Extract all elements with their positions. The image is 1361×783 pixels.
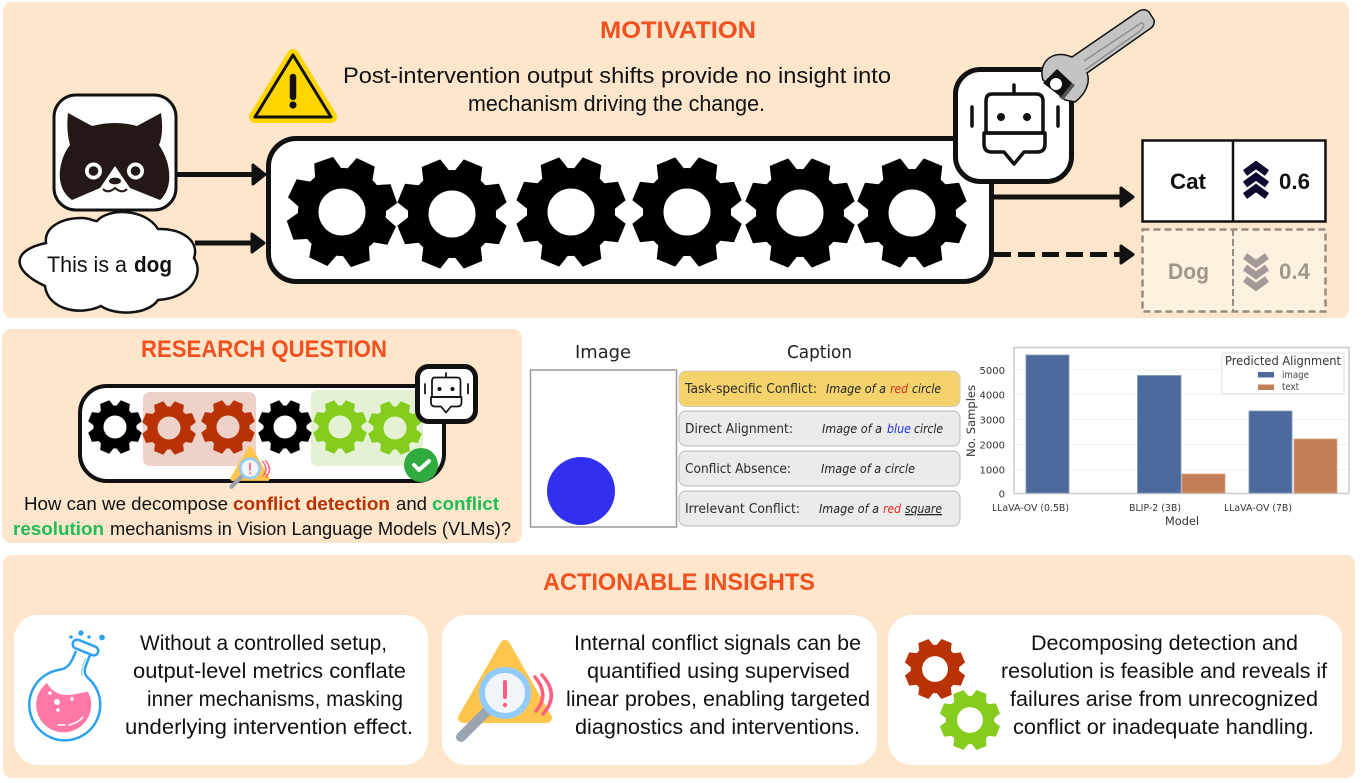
- text: linear probes insight: diagnostics and interventions.: [575, 716, 860, 739]
- legend: [1222, 353, 1344, 394]
- text: research question: [13, 493, 511, 539]
- heading: image: Image: [575, 343, 631, 363]
- icon: small conflict detection: [232, 448, 269, 487]
- text: decomposition insight: [1001, 632, 1327, 739]
- output: dog score: 0.4: [1279, 259, 1311, 284]
- row: direct alignment: [679, 411, 960, 446]
- icon: flask: [29, 630, 105, 740]
- bars: text: [1182, 439, 1337, 493]
- text: research question: and: [396, 493, 427, 514]
- figure: image and caption conditions: [530, 343, 960, 527]
- row: direct alignment: Direct Alignment:: [685, 422, 793, 437]
- text: research question: conflict detection: [233, 493, 390, 514]
- row: conflict absence: Image of a circle: [821, 461, 915, 476]
- text: decomposition insight: resolution is feasible and reveals if: [1001, 660, 1327, 683]
- row: irrelevant conflict: [679, 491, 960, 526]
- card: linear probes: [442, 615, 877, 765]
- row: task-specific conflict: [679, 371, 960, 406]
- text: controlled setup insight: Without a controlled setup,: [140, 632, 387, 655]
- axis labels: No. Samples: [964, 385, 978, 457]
- text: linear probes insight: quantified using supervised: [587, 660, 850, 683]
- axis labels: BLIP-2 (3B): [1129, 503, 1181, 514]
- icon: robot badge: [956, 70, 1072, 182]
- icon: check badge: [404, 448, 438, 482]
- axis labels: 1000: [980, 466, 1005, 476]
- row: direct alignment: Image of a: [822, 421, 882, 436]
- axis labels: 4000: [980, 390, 1005, 402]
- icon: conflict detection: [461, 645, 551, 737]
- heading: motivation: MOTIVATION: [600, 17, 756, 44]
- callout: caption cloud: [20, 212, 198, 313]
- text: controlled setup insight: [125, 632, 413, 739]
- arrow: image to model: [177, 165, 265, 184]
- callout: caption cloud: dog: [134, 252, 172, 277]
- icon: small robot badge: [418, 366, 476, 422]
- bar chart: predicted alignment: [964, 348, 1349, 528]
- text: motivation statement: Post-intervention output shifts provide no insight into: [343, 63, 891, 88]
- text: research question: mechanisms in Vision Language Models (VLMs)?: [110, 518, 511, 539]
- row: direct alignment: blue: [887, 421, 911, 436]
- axis labels: [964, 366, 1292, 528]
- axis labels: 0: [999, 490, 1005, 500]
- output: cat score: [1142, 140, 1326, 222]
- axis labels: 2000: [980, 440, 1005, 452]
- text: controlled setup insight: output-level metrics conflate: [133, 660, 406, 683]
- row: irrelevant conflict: Image of a: [819, 501, 879, 516]
- text: research question: conflict: [432, 493, 499, 514]
- icon: warning triangle: [255, 55, 331, 117]
- row: irrelevant conflict: red: [883, 501, 901, 516]
- row: task-specific conflict: red: [890, 381, 908, 396]
- legend: text: [1282, 382, 1299, 393]
- row: conflict absence: [679, 451, 960, 486]
- row: direct alignment: circle: [914, 421, 943, 436]
- heading: research question: RESEARCH QUESTION: [141, 336, 387, 363]
- panel: actionable insights: [3, 555, 1355, 778]
- text: research question: How can we decompose: [24, 493, 228, 514]
- heading: actionable insights: ACTIONABLE INSIGHTS: [543, 569, 815, 596]
- axis labels: LLaVA-OV (0.5B): [992, 503, 1069, 514]
- icon: wrench: [1042, 10, 1154, 102]
- diagram: model with highlighted gears: [80, 386, 444, 481]
- panel: motivation: [3, 2, 1349, 318]
- row: irrelevant conflict: Irrelevant Conflict:: [685, 502, 800, 517]
- legend: Predicted Alignment: [1225, 354, 1341, 368]
- image: blue circle: [530, 370, 676, 527]
- legend: image: [1282, 370, 1309, 381]
- panel: research question: [2, 329, 522, 543]
- text: decomposition insight: conflict or inadequate handling.: [1013, 716, 1314, 739]
- row: task-specific conflict: Task-specific Conflict:: [684, 382, 817, 397]
- output: cat score: Cat: [1170, 169, 1207, 194]
- text: motivation statement: [343, 63, 891, 116]
- text: motivation statement: mechanism driving the change.: [468, 91, 765, 116]
- arrow: caption to model: [195, 234, 264, 252]
- icon: cat image: [54, 95, 176, 210]
- text: linear probes insight: Internal conflict signals can be: [574, 632, 861, 655]
- card: decomposition: [888, 615, 1342, 765]
- output: cat score: 0.6: [1279, 169, 1310, 194]
- arrow: output cat: [994, 188, 1133, 206]
- output: dog score: Dog: [1168, 259, 1209, 284]
- panel: model with gears: [268, 138, 992, 282]
- row: conflict absence: Conflict Absence:: [685, 462, 791, 477]
- icon: red and green gears: [904, 638, 1001, 751]
- row: task-specific conflict: Image of a: [826, 381, 886, 396]
- text: research question: resolution: [13, 518, 104, 539]
- row: irrelevant conflict: square: [905, 501, 942, 516]
- card: controlled setup: [14, 615, 428, 765]
- text: controlled setup insight: underlying intervention effect.: [125, 716, 413, 739]
- axis labels: Model: [1165, 514, 1199, 528]
- output: dog score: [1142, 229, 1326, 312]
- text: linear probes insight: [566, 632, 870, 739]
- text: controlled setup insight: inner mechanisms, masking: [147, 688, 403, 711]
- axis labels: LLaVA-OV (7B): [1224, 503, 1292, 514]
- callout: caption cloud: This is a: [47, 252, 128, 277]
- axis labels: 3000: [980, 416, 1005, 426]
- axis labels: 5000: [980, 366, 1005, 377]
- text: decomposition insight: Decomposing detection and: [1031, 632, 1298, 655]
- bars: image: [1026, 355, 1292, 493]
- heading: caption: Caption: [787, 343, 852, 363]
- arrow: output dog dashed: [994, 246, 1133, 263]
- row: task-specific conflict: circle: [912, 381, 941, 396]
- text: linear probes insight: linear probes, enabling targeted: [566, 688, 870, 711]
- text: decomposition insight: failures arise from unrecognized: [1010, 688, 1318, 711]
